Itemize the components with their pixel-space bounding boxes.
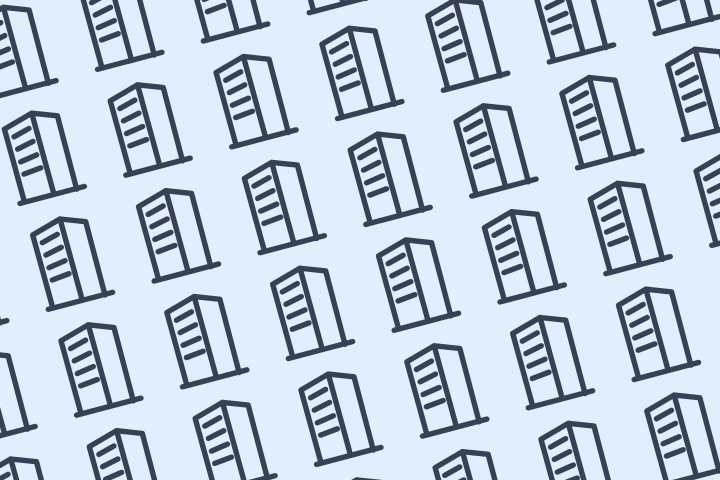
icon: building xyxy=(61,325,141,415)
icon: building xyxy=(89,431,169,480)
icon: building xyxy=(379,240,459,330)
icon: building xyxy=(668,49,720,139)
icon: building xyxy=(244,162,324,253)
icon: building xyxy=(301,374,381,464)
icon: building xyxy=(619,289,699,380)
icon: building xyxy=(0,459,63,480)
icon: building xyxy=(273,268,353,359)
icon: building xyxy=(110,85,190,175)
icon: building xyxy=(82,0,162,69)
icon: building xyxy=(350,134,430,224)
icon: building xyxy=(428,0,508,90)
icon: building xyxy=(513,318,593,408)
icon: building xyxy=(0,7,56,98)
icon: building xyxy=(322,28,402,119)
icon: building xyxy=(562,78,642,168)
icon: building xyxy=(640,0,720,34)
icon: building xyxy=(294,0,374,13)
icon: building xyxy=(216,57,296,147)
icon: building xyxy=(0,247,7,338)
icon: building xyxy=(33,219,113,309)
icon: building xyxy=(329,480,409,481)
icon: building xyxy=(4,113,84,203)
icon: building xyxy=(541,423,621,480)
icon: building xyxy=(167,297,247,387)
icon: building xyxy=(435,452,515,480)
icon: building xyxy=(195,402,275,480)
icon: building xyxy=(484,212,564,302)
icon: building xyxy=(647,395,720,480)
icon: building xyxy=(534,0,614,62)
icon: building xyxy=(696,155,720,245)
icon: building xyxy=(188,0,268,41)
icon: building xyxy=(0,353,35,443)
icon: building xyxy=(456,106,536,196)
icon: building xyxy=(590,183,670,274)
icon: building xyxy=(139,191,219,281)
icon: building xyxy=(407,346,487,436)
